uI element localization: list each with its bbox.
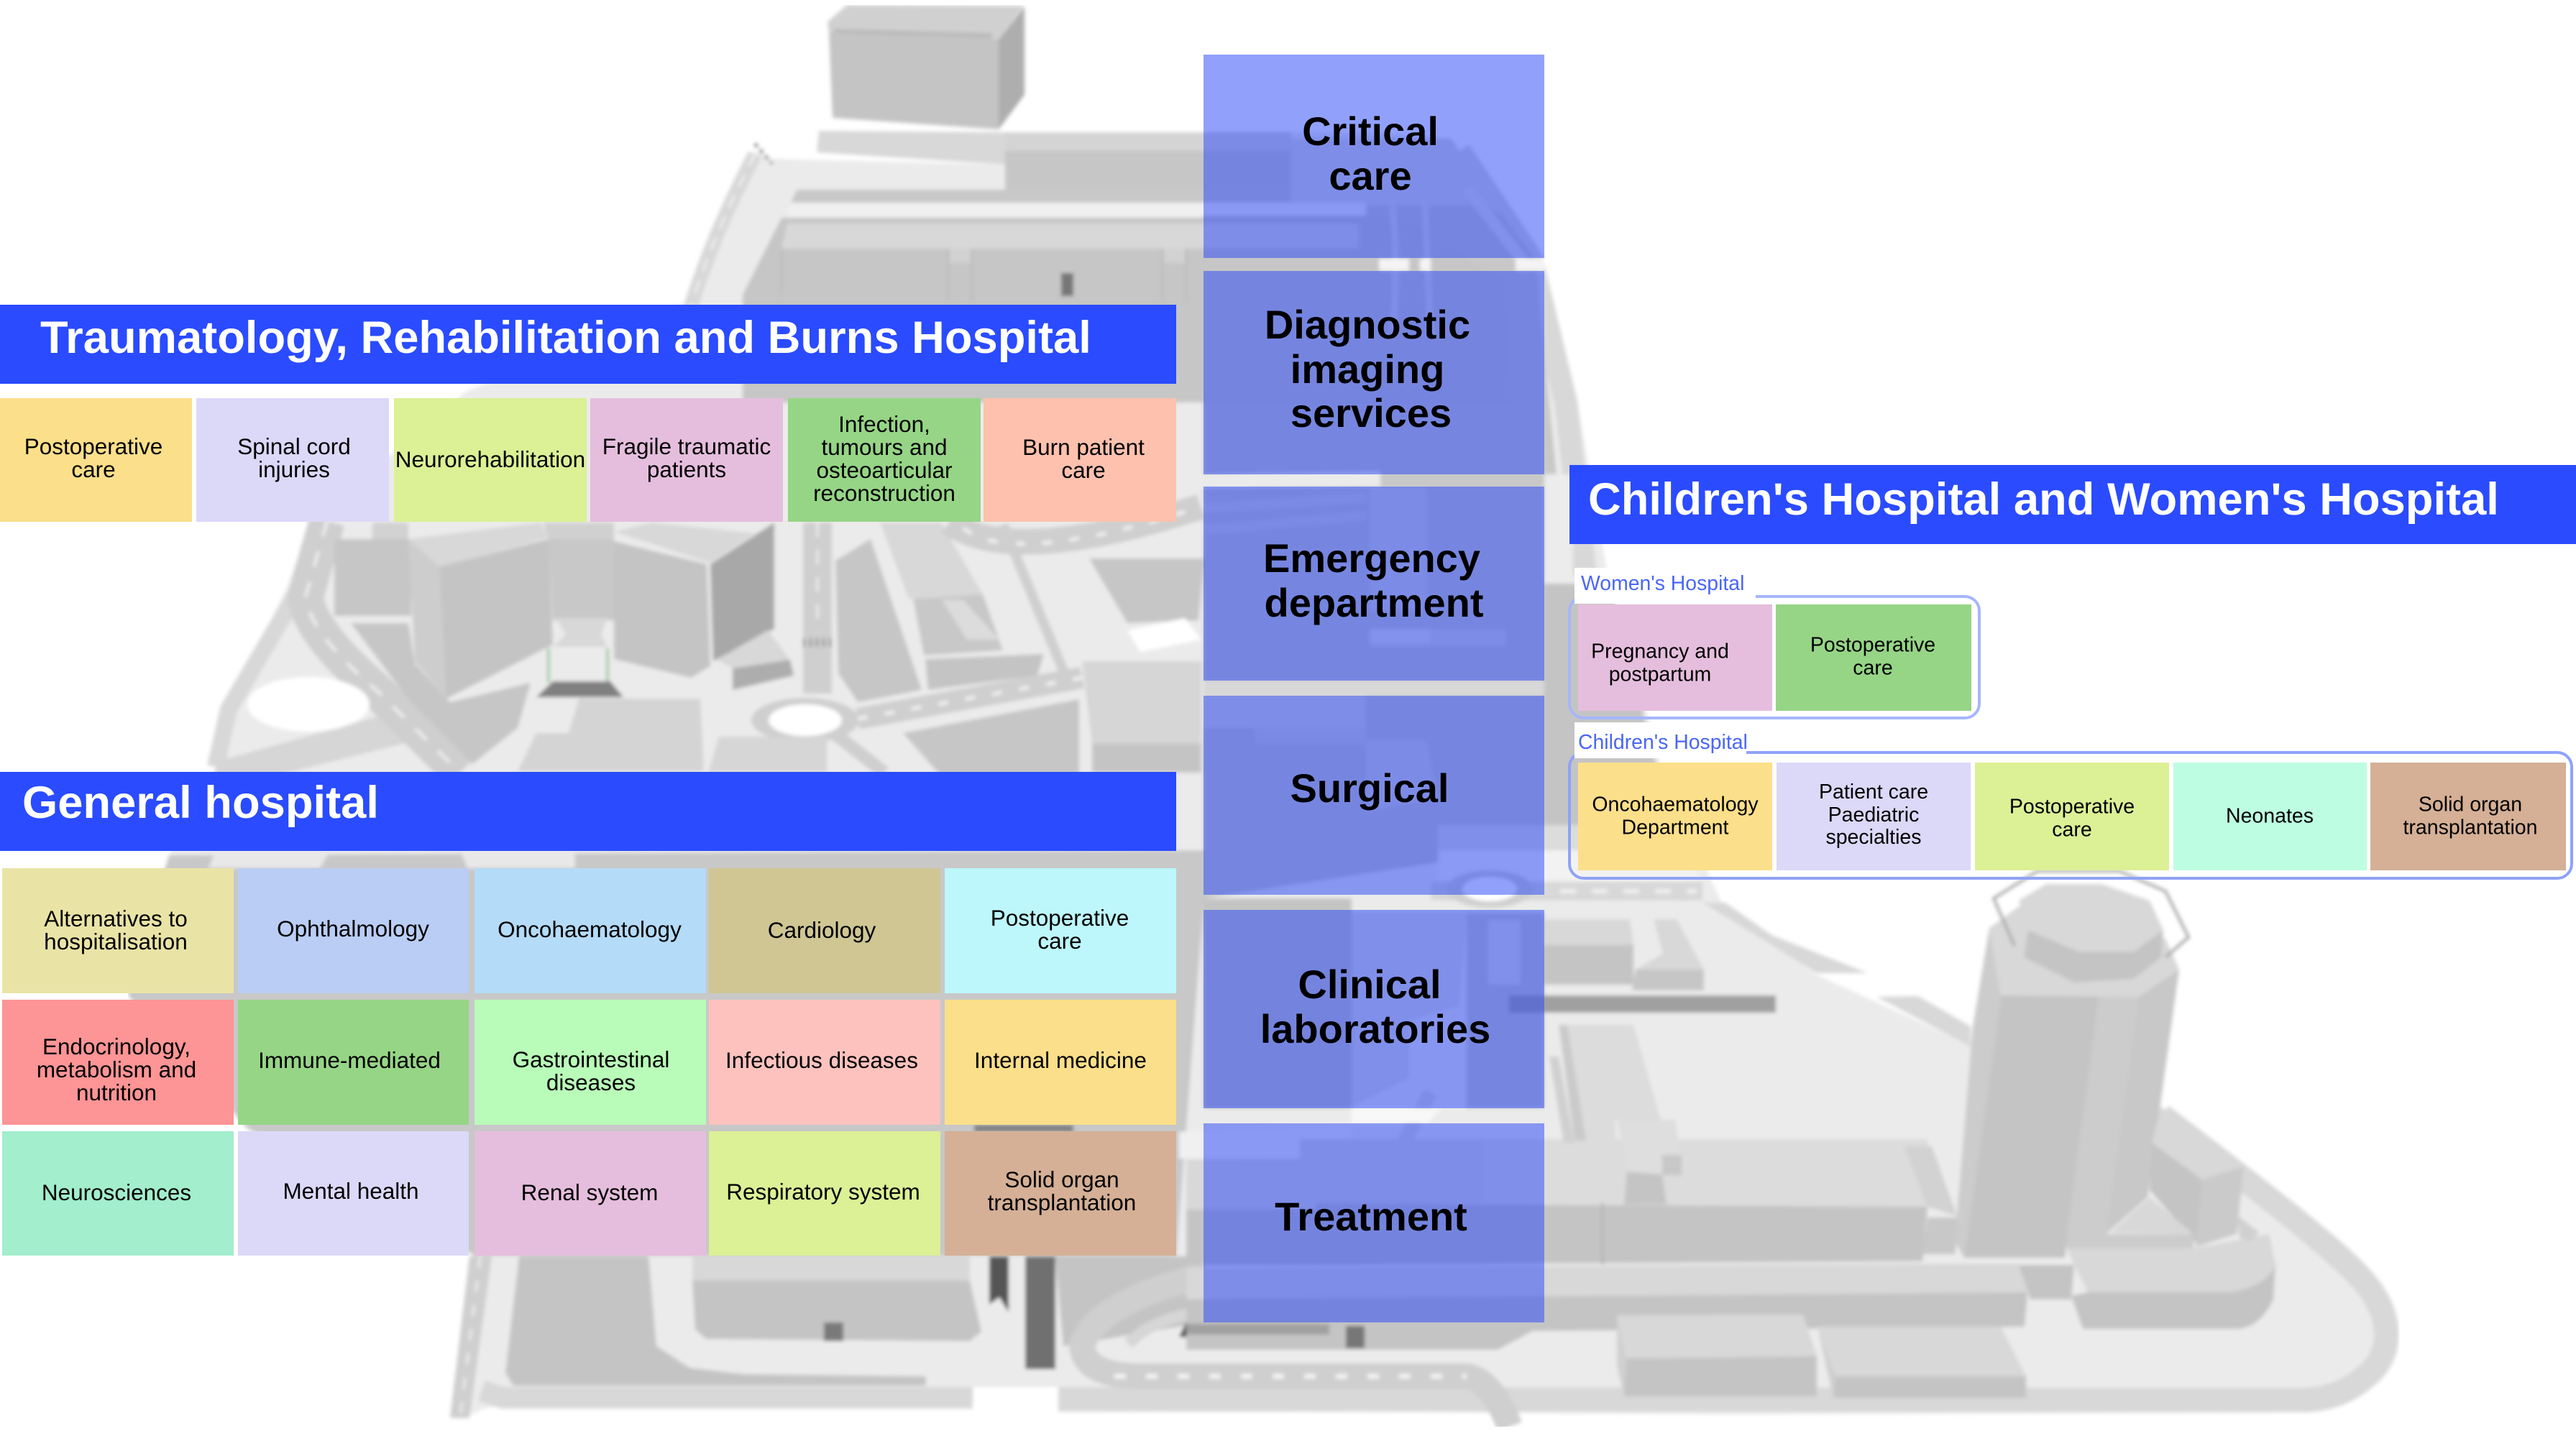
tile: Postoperative care: Postoperative <box>1810 634 1935 657</box>
column: Emergency department: department <box>1265 579 1483 625</box>
left road <box>306 521 460 773</box>
tile: Oncohaematology: Oncohaematology <box>498 916 682 942</box>
tile: Solid organ transplantation: transplantation <box>988 1189 1136 1215</box>
tile: Neurorehabilitation <box>394 398 587 522</box>
tile: Mental health <box>238 1131 469 1256</box>
column: Critical care: care <box>1329 152 1412 198</box>
column: Clinical laboratories: Clinical <box>1298 962 1441 1007</box>
back buildings <box>791 190 1291 203</box>
tile: Endocrinology, metabolism and nutrition: Endocrinology, <box>42 1033 191 1059</box>
tile: Mental health: Mental health <box>283 1178 419 1204</box>
panel: service columns <box>1204 55 1544 1322</box>
tile: Fragile traumatic patients: Fragile traumatic <box>602 433 771 459</box>
label: Children's Hospital <box>1575 722 1746 758</box>
light details under columns <box>1391 198 1431 338</box>
tile: Solid organ transplantation: Solid organ <box>1004 1166 1119 1192</box>
tile: Postoperative care: care <box>1037 928 1082 954</box>
tile: Postoperative care: care <box>2052 818 2092 841</box>
column: Diagnostic imaging services: services <box>1291 390 1452 436</box>
tile: Internal medicine: Internal medicine <box>974 1047 1147 1073</box>
column: Treatment: Treatment <box>1275 1194 1467 1239</box>
tile: Alternatives to hospitalisation <box>2 868 234 993</box>
tile: Patient care Paediatric specialties: specialties <box>1825 826 1922 849</box>
tile: Neonates: Neonates <box>2226 804 2314 827</box>
tile: Respiratory system <box>709 1131 940 1256</box>
label: Women's Hospital: Women's Hospital <box>1581 572 1744 595</box>
heading: General hospital <box>0 772 1176 851</box>
tile: Pregnancy and postpartum: Pregnancy and <box>1591 640 1729 663</box>
tile: Infectious diseases <box>709 1000 940 1125</box>
tile: Endocrinology, metabolism and nutrition <box>2 1000 234 1125</box>
tile: Solid organ transplantation: Solid organ <box>2419 793 2522 816</box>
tile: Infectious diseases: Infectious diseases <box>725 1047 918 1073</box>
tile: Renal system <box>475 1131 706 1256</box>
tile: Patient care Paediatric specialties: Paediatric <box>1828 803 1919 826</box>
tile: Infection, tumours and osteoarticular reconstruction: tumours and <box>821 434 948 460</box>
central road and roundabout <box>803 522 832 694</box>
centre block under tiles <box>128 850 1204 1256</box>
tile: Postoperative care: Postoperative <box>991 905 1129 931</box>
heading: Children's Hospital and Women's Hospital: Children's Hospital and Women's Hospital <box>1588 474 2499 525</box>
tile: Endocrinology, metabolism and nutrition: nutrition <box>76 1079 157 1105</box>
tile: Spinal cord injuries: injuries <box>258 456 330 482</box>
lower blocks <box>1617 1315 1817 1358</box>
right of central road <box>835 539 922 702</box>
tile: Fragile traumatic patients: patients <box>647 456 726 482</box>
tile: Spinal cord injuries: Spinal cord <box>237 433 351 459</box>
tile: Fragile traumatic patients <box>590 398 783 522</box>
tile: Patient care Paediatric specialties: Patient care <box>1819 781 1928 804</box>
column: Diagnostic imaging services: imaging <box>1291 346 1444 391</box>
column: Diagnostic imaging services <box>1204 271 1544 474</box>
tile: Gastrointestinal diseases: Gastrointestinal <box>513 1046 669 1072</box>
tile: Neurorehabilitation: Neurorehabilitation <box>395 446 585 472</box>
tile: Alternatives to hospitalisation: hospitalisation <box>44 929 188 954</box>
top building and base <box>817 131 1005 165</box>
tile: Oncohaematology Department: Oncohaematology <box>1592 793 1759 816</box>
tile: Burn patient care <box>984 398 1176 522</box>
tile: Postoperative care: Postoperative <box>24 433 162 459</box>
ground <box>128 132 2399 1419</box>
group border <box>1568 751 2573 880</box>
tile: Burn patient care: care <box>1061 457 1106 483</box>
column: Surgical: Surgical <box>1291 765 1449 811</box>
tile: Internal medicine <box>945 1000 1176 1125</box>
group border <box>1568 595 1981 719</box>
tile: Ophthalmology <box>238 868 469 993</box>
tile: Postoperative care <box>0 398 192 522</box>
heading: General hospital: General hospital <box>22 778 379 828</box>
tile: Burn patient care: Burn patient <box>1022 434 1145 460</box>
tile: Patient care Paediatric specialties <box>1777 763 1971 870</box>
outer bands <box>1058 1115 2386 1400</box>
column: Clinical laboratories: laboratories <box>1260 1006 1490 1051</box>
panel: Traumatology tiles <box>0 398 1176 522</box>
column: Critical care: Critical <box>1302 109 1439 154</box>
tile: Oncohaematology <box>475 868 706 993</box>
tile: Respiratory system: Respiratory system <box>726 1179 920 1205</box>
grey base beneath the service columns <box>1204 190 1557 898</box>
heading: Traumatology, Rehabilitation and Burns Hospital: Traumatology, Rehabilitation and Burns Hospital <box>40 313 1091 363</box>
tile: Immune-mediated: Immune-mediated <box>258 1047 441 1073</box>
tile: Endocrinology, metabolism and nutrition: metabolism and <box>37 1056 196 1082</box>
lower left area <box>450 1256 492 1418</box>
tile: Pregnancy and postpartum: postpartum <box>1609 663 1711 686</box>
panel: General hospital tiles <box>2 868 1176 1256</box>
tile: Postoperative care <box>1975 763 2169 870</box>
tile: Pregnancy and postpartum <box>1578 604 1772 711</box>
tile: Cardiology: Cardiology <box>768 917 876 943</box>
tile: Postoperative care <box>945 868 1176 993</box>
tile: Spinal cord injuries <box>196 398 389 522</box>
tile: Solid organ transplantation <box>2370 763 2566 870</box>
tile: Postoperative care: Postoperative <box>2009 795 2135 818</box>
tile: Postoperative care <box>1776 604 1971 711</box>
column: Emergency department: Emergency <box>1263 535 1480 581</box>
tile: Neurosciences <box>2 1131 234 1256</box>
panel: Women's Hospital group <box>1568 568 1981 719</box>
road near top left <box>690 155 755 309</box>
lower centre buildings <box>1186 1159 1316 1210</box>
column: Emergency department <box>1204 487 1544 681</box>
tile: Neonates <box>2173 763 2367 870</box>
tile: Infection, tumours and osteoarticular reconstruction: Infection, <box>838 411 930 437</box>
column: Clinical laboratories <box>1204 910 1544 1108</box>
tile: Infection, tumours and osteoarticular reconstruction <box>788 398 981 522</box>
tile: Oncohaematology Department <box>1578 763 1772 870</box>
column: Diagnostic imaging services: Diagnostic <box>1265 302 1470 347</box>
column: Surgical <box>1204 696 1544 895</box>
label: Women's Hospital <box>1575 568 1756 604</box>
hairpin road <box>1082 1276 1510 1427</box>
tile: Postoperative care: care <box>71 456 116 482</box>
panel: Children's Hospital group <box>1568 722 2573 880</box>
tile: Gastrointestinal diseases <box>475 1000 706 1125</box>
tile: Infection, tumours and osteoarticular reconstruction: reconstruction <box>813 480 955 506</box>
tile: Solid organ transplantation <box>945 1131 1176 1256</box>
tile: Immune-mediated <box>238 1000 469 1125</box>
tile: Ophthalmology: Ophthalmology <box>277 916 429 942</box>
tile: Renal system: Renal system <box>521 1179 658 1205</box>
heading: Children's Hospital and Women's Hospital <box>1569 465 2576 544</box>
left building complex <box>334 539 411 616</box>
tile: Oncohaematology Department: Department <box>1622 816 1728 839</box>
tile: Cardiology <box>709 868 940 993</box>
tile: Neurosciences: Neurosciences <box>42 1179 191 1205</box>
tile: Postoperative care: care <box>1853 656 1893 679</box>
tile: Solid organ transplantation: transplantation <box>2403 816 2537 839</box>
column: Critical care <box>1204 55 1544 258</box>
heading: Traumatology, Rehabilitation and Burns Hospital <box>0 305 1176 384</box>
tile: Gastrointestinal diseases: diseases <box>546 1069 636 1095</box>
tower <box>1905 1146 1957 1216</box>
tile: Alternatives to hospitalisation: Alternatives to <box>44 906 188 931</box>
label: Children's Hospital: Children's Hospital <box>1578 731 1748 754</box>
tile: Infection, tumours and osteoarticular reconstruction: osteoarticular <box>816 457 953 483</box>
column: Treatment <box>1204 1123 1544 1322</box>
